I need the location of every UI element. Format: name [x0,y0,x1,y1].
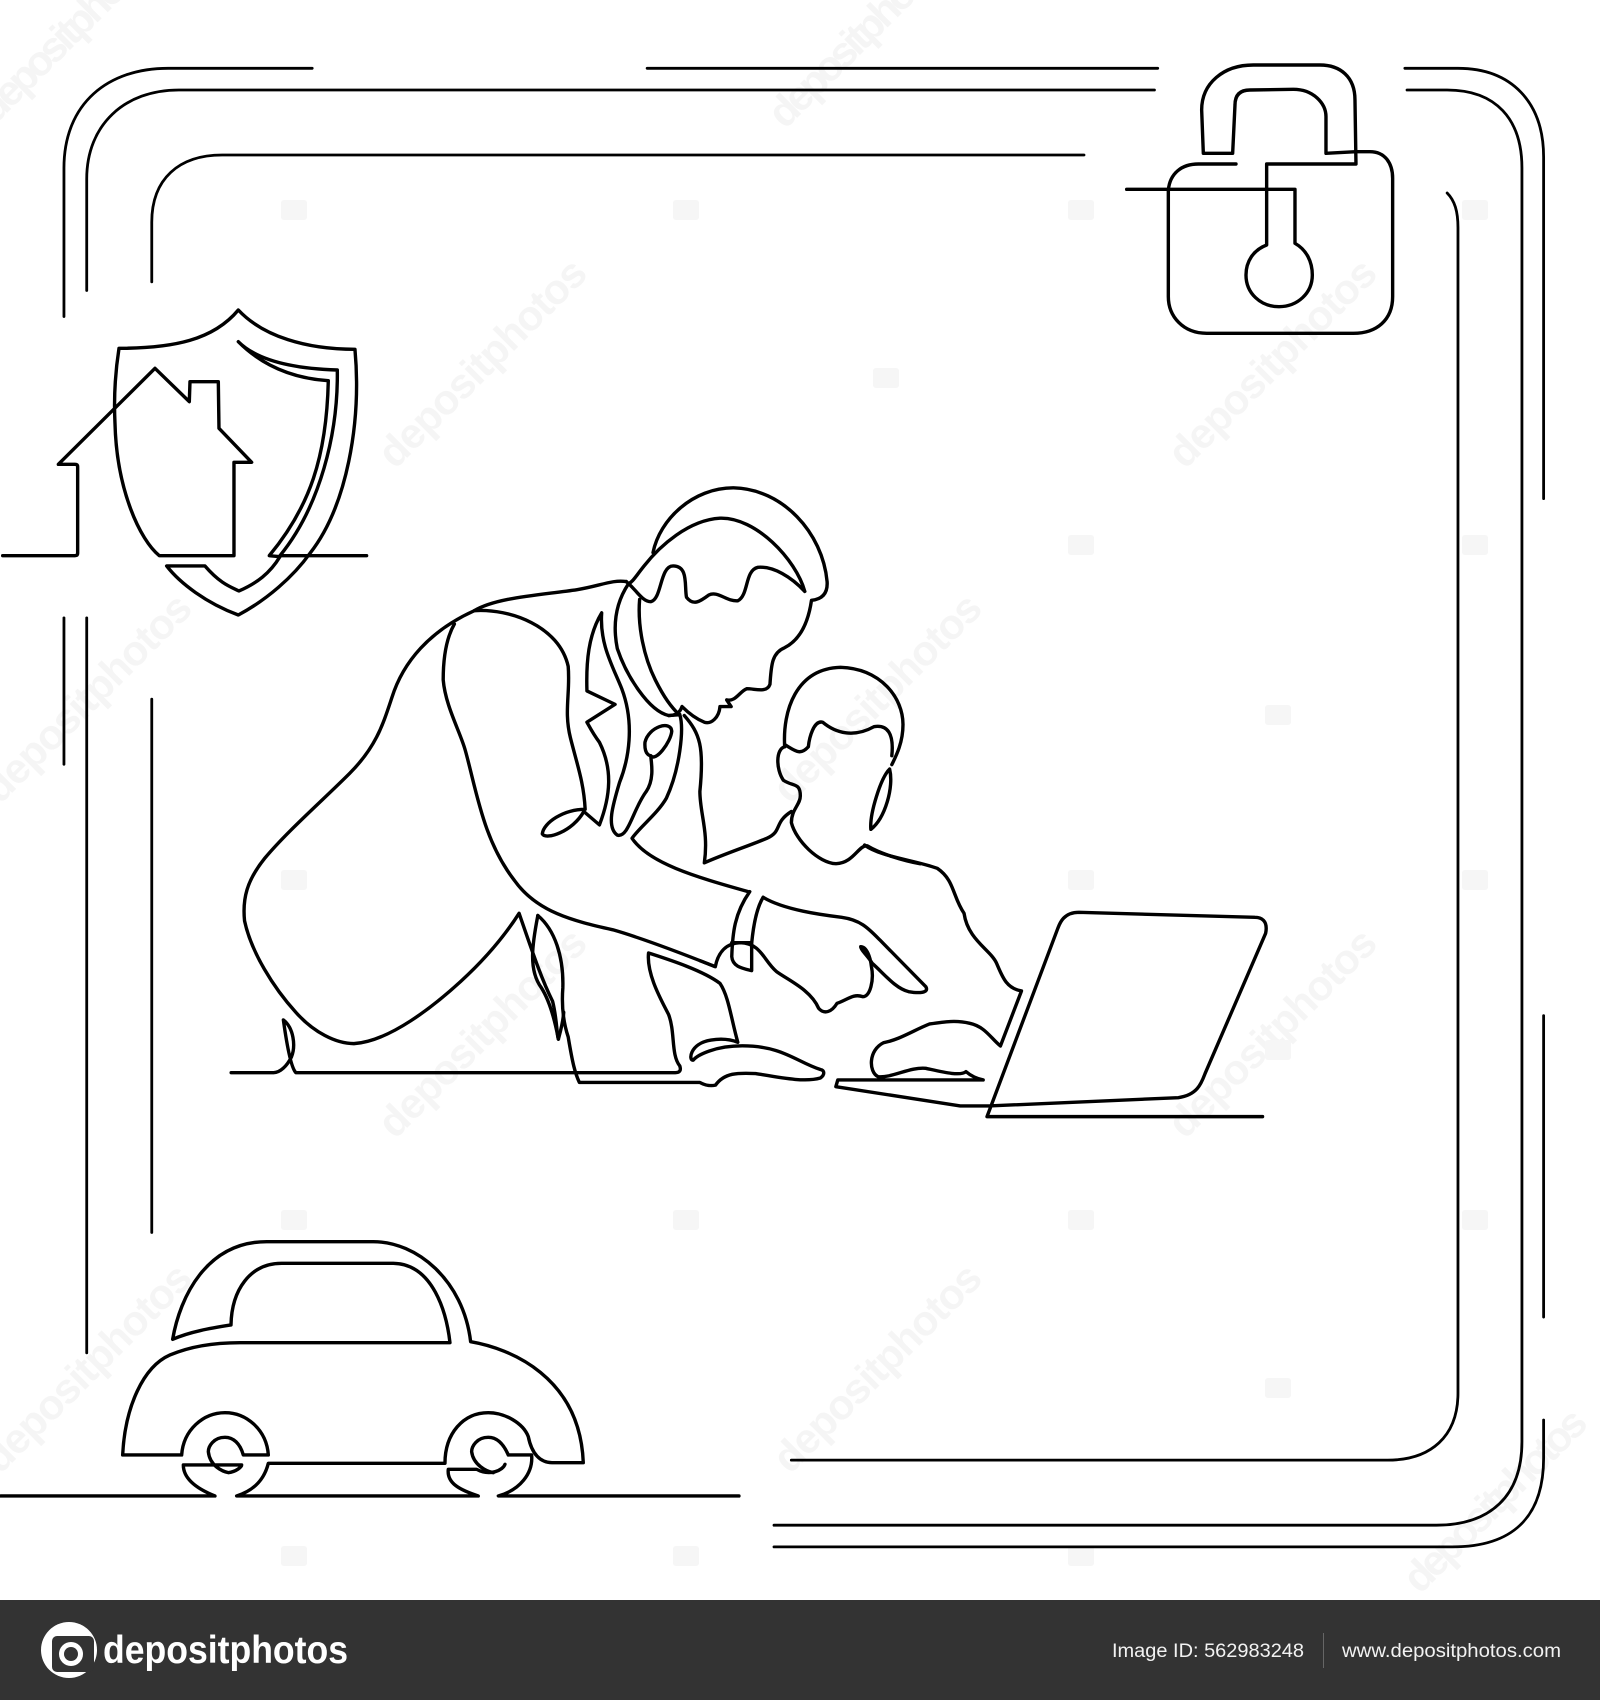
logo: depositphotos: depositphotos [103,1629,348,1672]
illustration: pointing hand, boy's shoulder, laptop [700,845,1266,1117]
icon: house inside shield [3,310,367,615]
watermark pattern: depositphotos [368,249,596,476]
watermark pattern: depositphotos [763,584,991,811]
watermark pattern: depositphotos [1393,1398,1596,1601]
watermark pattern: depositphotos [763,1254,991,1481]
man: back and trousers [244,581,626,1044]
hand: pointing [700,897,927,1012]
footer bar [0,1600,1600,1700]
image ID text: Image ID: 562983248 [1112,1641,1304,1662]
watermark pattern: depositphotos [1158,919,1386,1146]
icon: camera badge [41,1622,97,1678]
icon: padlock [1127,65,1393,333]
shirt between man and boy [684,716,791,863]
boy: shoulder, arm and laptop [836,845,1266,1117]
boy: head [778,747,920,864]
man: arm [443,624,715,966]
icon: car [1,1242,739,1496]
man: head and face [653,488,827,723]
man: hair [626,518,805,602]
watermark pattern: depositphotos [1158,249,1386,476]
man: leg and book [231,916,824,1086]
man: jacket, lapel and stethoscope [474,610,672,836]
website text: www.depositphotos.com [1341,1641,1561,1662]
logo: depositphotos [41,1622,348,1678]
watch strap [732,892,763,971]
watermark pattern: depositphotos [368,919,596,1146]
illustration: man and boy [231,488,920,1086]
